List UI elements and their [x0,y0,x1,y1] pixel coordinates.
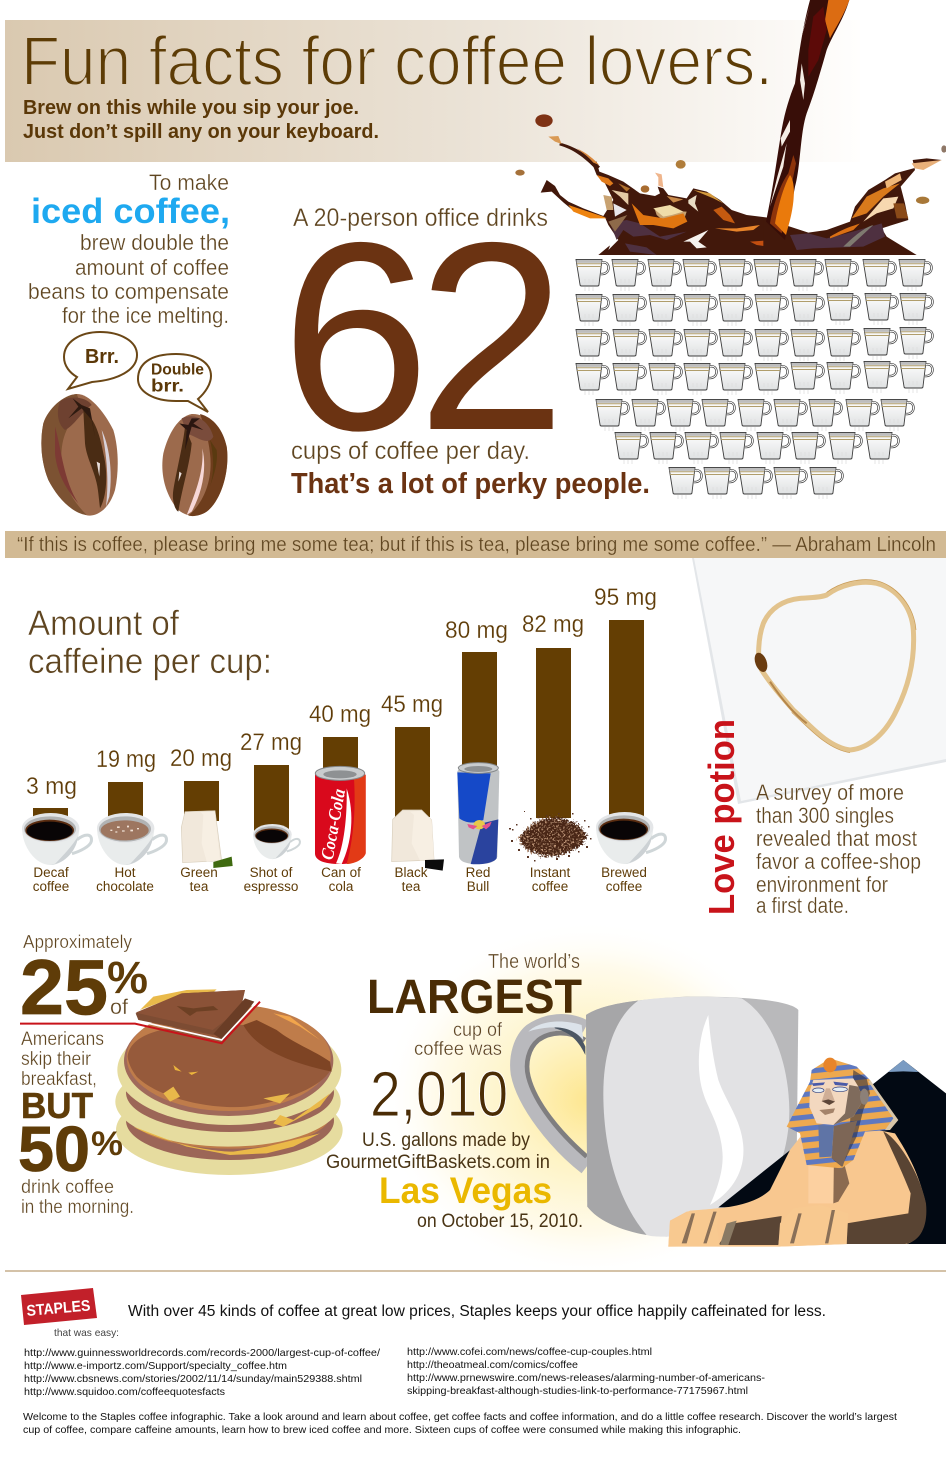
footer paragraph: cup of coffee, compare caffeine amounts, learn how to brew iced coffee and more. Sixteen cups of coffee were consumed while making this infographic. [23,1424,741,1436]
sphinx illustration [668,1058,926,1247]
iced coffee text block: for the ice melting. [62,303,229,328]
speech bubble: Double brr.: brr. [151,376,184,396]
bar: black tea 45 mg [381,691,443,817]
love potion survey text [756,780,921,918]
bar: decaf coffee 3 mg: 3 mg [26,773,77,800]
splash left side [541,160,773,255]
iced coffee text block: beans to compensate [28,279,229,304]
pancake stack illustration [20,989,343,1175]
bar chart category labels: tea [402,879,421,894]
bar: cola 40 mg: 40 mg [309,701,371,728]
source links right column: http://www.cofei.com/news/coffee-cup-couples.html [407,1346,652,1358]
iced coffee text block: To make [149,170,229,195]
breakfast statistics text: 25 [20,943,108,1031]
breakfast statistics text: in the morning. [21,1197,134,1218]
breakfast statistics text: % [91,1125,123,1163]
icon: green tea bag [181,811,233,868]
coffee ring stain [752,580,916,753]
source links right column: http://www.prnewswire.com/news-releases/alarming-number-of-americans- [407,1372,766,1384]
header subtitle: Brew on this while you sip your joe. [23,97,359,119]
bar chart category labels: Black [394,865,428,880]
sphinx body [668,1127,926,1247]
bar chart category labels: Shot of [250,865,293,880]
caffeine chart heading: caffeine per cup: [28,642,272,681]
bar chart category labels: Green [180,865,218,880]
giant mug illustration [518,997,798,1237]
big number 62: 6 [281,186,430,486]
love potion survey text: a first date. [756,893,849,918]
Love potion vertical heading: Love potion [701,719,742,915]
icon: hot chocolate cup [97,813,166,865]
source links left column: http://www.squidoo.com/coffeequotesfacts [24,1386,225,1398]
bar chart category labels [33,865,647,894]
bar: hot chocolate 19 mg [96,746,156,822]
sphinx head [787,1058,898,1168]
big number 62 [281,186,566,486]
largest cup text block: U.S. gallons made by [362,1130,530,1151]
bar chart category labels: coffee [606,879,642,894]
bar: brewed coffee 95 mg [594,584,657,820]
icon: decaf coffee cup [22,813,91,865]
largest cup text block: 2,010 [370,1058,508,1130]
bar: green tea 20 mg [170,745,232,821]
header band [5,20,860,162]
largest cup text block: coffee was [414,1039,502,1060]
bar: instant coffee 82 mg: 82 mg [522,611,584,638]
caffeine chart heading: Amount of [28,604,179,643]
napkin with coffee ring [692,558,946,804]
caffeine chart heading [28,604,272,681]
bar chart category labels: Can of [321,865,361,880]
bar chart category labels: Hot [114,865,136,880]
largest cup text block: cup of [453,1020,503,1041]
bar: brewed coffee 95 mg: 95 mg [594,584,657,611]
iced coffee text block: brew double the [80,230,229,255]
breakfast statistics text: Americans [21,1029,104,1050]
bar chart category labels: coffee [532,879,568,894]
bar chart category labels: Bull [467,879,489,894]
Staples logo: STAPLES [26,1297,91,1320]
bar chart category labels: Instant [530,865,571,880]
iced coffee text block [28,170,230,328]
bar: green tea 20 mg: 20 mg [170,745,232,772]
source links left column [24,1347,380,1398]
bar chart category labels: Decaf [33,865,69,880]
perky people text: That’s a lot of perky people. [291,468,650,500]
largest cup text block: GourmetGiftBaskets.com in [326,1152,550,1173]
breakfast statistics text: of [110,996,128,1019]
love potion survey text: than 300 singles [756,803,894,828]
bar chart category labels: coffee [33,879,69,894]
bar: instant coffee 82 mg [522,611,584,818]
bar: espresso 27 mg: 27 mg [240,729,302,756]
pyramid [718,1060,946,1244]
footer paragraph: Welcome to the Staples coffee infographic. Take a look around and learn about coffee, get coffee facts and coffee information, and do a little coffee research. Discover the world’s largest [23,1411,897,1423]
iced coffee text block: iced coffee, [31,192,230,231]
speech bubble: Double brr.: Double [151,362,204,378]
Staples logo [21,1288,119,1339]
icon: cola can: Coca-Cola [317,787,349,861]
breakfast statistics text: Approximately [23,931,133,952]
icon: small coffee bean [162,414,227,516]
source links right column [407,1346,766,1397]
header subtitle [23,97,379,143]
icon: instant coffee pile [509,811,592,862]
bar chart category labels: cola [329,879,354,894]
cups per day text: cups of coffee per day. [291,437,530,465]
icon: large coffee bean [41,394,118,516]
bar chart category labels: Brewed [601,865,647,880]
iced coffee text block: amount of coffee [75,255,229,280]
office drinks heading: A 20-person office drinks [293,204,548,232]
source links right column: http://theoatmeal.com/comics/coffee [407,1359,578,1371]
splash right side and stream [515,0,946,255]
bar chart category labels: chocolate [96,879,154,894]
breakfast statistics text: % [107,952,148,1003]
breakfast statistics text: drink coffee [21,1177,114,1198]
title: Fun facts for coffee lovers. [21,22,773,100]
largest cup text block: on October 15, 2010. [417,1211,583,1232]
breakfast statistics text: 50 [18,1113,90,1185]
breakfast statistics text: BUT [21,1085,93,1126]
speech bubble: Brr.: Brr. [85,346,119,368]
icon: espresso cup [253,824,300,859]
bar: hot chocolate 19 mg: 19 mg [96,746,156,773]
bar: decaf coffee 3 mg [26,773,77,828]
bar chart category labels: Red [466,865,490,880]
footer paragraph [23,1411,897,1436]
love potion survey text: favor a coffee-shop [756,849,921,874]
largest cup text block: Las Vegas [379,1170,552,1211]
love potion survey text: revealed that most [756,826,917,851]
love potion survey text: A survey of more [756,780,904,805]
bar: black tea 45 mg: 45 mg [381,691,443,718]
largest cup text block: The world’s [488,951,580,973]
icon: black tea bag [392,810,444,871]
header subtitle: Just don’t spill any on your keyboard. [23,121,379,143]
icon: cola can [315,766,366,864]
speech bubble: Double brr. [138,354,211,412]
bar chart category labels: espresso [244,879,298,894]
big number 62: 2 [417,186,566,486]
icon: energy drink can [457,763,499,864]
source links left column: http://www.guinnessworldrecords.com/records-2000/largest-cup-of-coffee/ [24,1347,380,1359]
source links left column: http://www.e-importz.com/Support/specialty_coffee.htm [24,1360,287,1372]
bar chart: caffeine per cup [26,584,657,835]
breakfast statistics text: breakfast, [21,1069,97,1090]
bar: cola 40 mg [309,701,371,777]
bar chart category labels: tea [190,879,209,894]
Staples tagline: With over 45 kinds of coffee at great low prices, Staples keeps your office happily caffeinated for less. [128,1303,826,1320]
speech bubble: Brr. [64,332,137,389]
source links right column: skipping-breakfast-although-studies-link-to-performance-77175967.html [407,1385,748,1397]
largest cup text block: LARGEST [367,971,582,1024]
yellow glow behind giant mug [380,920,800,1280]
largest cup text block [326,951,583,1232]
icon array: 62 coffee cups [576,260,932,499]
breakfast statistics text: skip their [21,1049,92,1070]
icon: brewed coffee cup [596,812,665,864]
bar: red bull 80 mg [445,617,508,772]
bar: espresso 27 mg [240,729,302,835]
source links left column: http://www.cbsnews.com/stories/2002/11/14/sunday/main529388.shtml [24,1373,362,1385]
love potion survey text: environment for [756,872,888,897]
bar: red bull 80 mg: 80 mg [445,617,508,644]
breakfast statistics text [18,931,148,1218]
Staples logo: that was easy: [54,1327,119,1339]
coffee pour and splash illustration [515,0,946,255]
